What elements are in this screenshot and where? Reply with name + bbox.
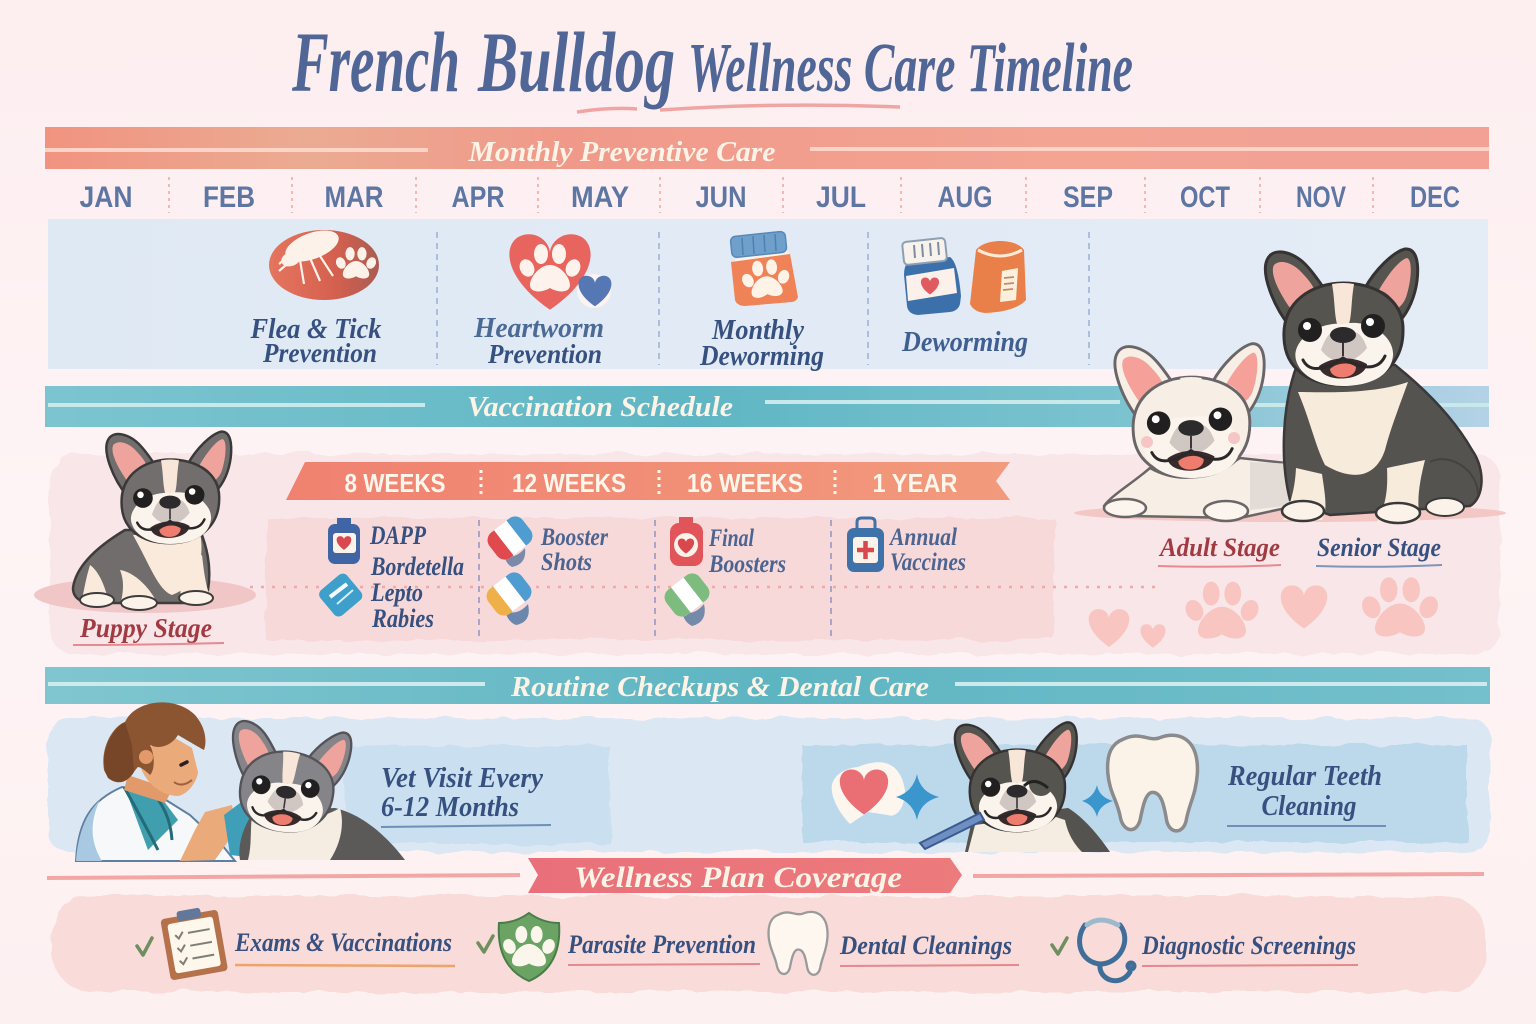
title: Bulldog [477, 14, 675, 110]
text: vet visit frequency [381, 762, 551, 827]
text: final boosters: Final [708, 525, 754, 552]
icon: heart on tooth [832, 762, 905, 824]
ribbon: age milestones: 12 WEEKS [512, 468, 626, 498]
panel: coverage background [52, 896, 1486, 992]
icon: small sparkle [1082, 785, 1113, 817]
text: exams and vaccinations: Exams & Vaccinations [234, 928, 452, 957]
icon: flea and paw [269, 224, 379, 300]
text: vaccine names: Rabies [371, 604, 434, 633]
illustration: puppy stage dog [34, 432, 256, 613]
ribbon: age milestones: 16 WEEKS [687, 468, 803, 498]
column: 8 weeks vaccines [317, 518, 464, 633]
text: annual vaccines: Annual [888, 524, 957, 551]
text: vet visit frequency: Vet Visit Every [381, 762, 543, 794]
band: wellness plan coverage: Wellness Plan Coverage [574, 861, 902, 894]
month labels: DEC [1410, 181, 1460, 214]
band: vaccination schedule: Vaccination Schedule [467, 391, 733, 423]
text: annual vaccines: Vaccines [890, 549, 966, 576]
text: deworming: Deworming [901, 327, 1028, 358]
icon: blue vaccine card [317, 571, 365, 619]
band: monthly preventive care [45, 127, 1489, 169]
ribbon: age milestones: 1 YEAR [872, 468, 958, 498]
text: vaccine names [369, 521, 464, 633]
icon: red and blue capsule [484, 513, 536, 567]
label: senior stage: Senior Stage [1317, 533, 1441, 562]
title: French [291, 14, 460, 110]
text: booster shots: Shots [541, 549, 592, 576]
column: 12 weeks vaccines [483, 513, 608, 625]
icon: check [1052, 938, 1067, 954]
panel: vaccination background [50, 454, 1500, 654]
icon: tooth [769, 912, 828, 975]
icon: medicine bottle and can [902, 238, 1026, 315]
icon: stethoscope [1080, 920, 1134, 981]
illustration: senior stage dog [1265, 249, 1482, 523]
coverage item: dental cleanings [769, 912, 1019, 975]
ribbon: age milestones: 8 WEEKS [344, 468, 446, 498]
text: parasite prevention: Parasite Prevention [567, 930, 756, 959]
text: regular teeth cleaning: Regular Teeth [1227, 760, 1382, 792]
icon: clipboard [159, 904, 228, 981]
illustration: dog at vet [221, 717, 405, 860]
icon: medical kit [847, 518, 884, 572]
illustration: adult and senior dogs [1074, 249, 1506, 523]
text: booster shots [540, 524, 608, 576]
ribbon: age milestones [286, 462, 1010, 500]
text: flea and tick prevention [250, 314, 382, 368]
coverage item: parasite prevention [478, 913, 760, 981]
text: annual vaccines [888, 524, 966, 576]
text: monthly deworming [699, 315, 824, 372]
text: monthly deworming: Monthly [711, 315, 805, 346]
illustration: adult stage dog [1104, 344, 1295, 521]
text: dental cleanings: Dental Cleanings [839, 931, 1012, 960]
text: vaccine names: Lepto [370, 578, 423, 607]
coverage item: diagnostic screenings [1052, 920, 1358, 981]
month labels: APR [452, 181, 505, 214]
text: vaccine names: Bordetella [370, 552, 464, 581]
text: final boosters [708, 525, 786, 578]
icon: orange and blue capsule [483, 569, 535, 625]
icon: check [478, 936, 493, 952]
month labels: FEB [203, 181, 255, 214]
icon: large tooth [1108, 735, 1197, 831]
text: monthly deworming: Deworming [699, 341, 824, 372]
band: vaccination schedule [45, 386, 1489, 427]
icon: red vaccine bag [670, 517, 703, 566]
text: booster shots: Booster [540, 524, 608, 551]
text: heartworm prevention: Prevention [487, 339, 602, 369]
illustration: dog with toothbrush [920, 722, 1110, 852]
month labels: OCT [1180, 181, 1230, 214]
decorative hearts and paws [1089, 577, 1441, 648]
band: routine checkups and dental care: Routine Checkups & Dental Care [510, 671, 929, 703]
icon: check [137, 938, 152, 955]
panel: dental care [802, 722, 1467, 852]
month labels: MAR [324, 181, 384, 214]
text: regular teeth cleaning [1227, 760, 1386, 826]
coverage item: exams and vaccinations [137, 904, 455, 981]
text: flea and tick prevention: Prevention [262, 338, 377, 368]
text: diagnostic screenings: Diagnostic Screenings [1141, 931, 1356, 960]
month labels: MAY [571, 181, 629, 214]
icon: jar [730, 231, 798, 306]
text: vaccine names: DAPP [369, 521, 427, 550]
band: routine checkups and dental care [45, 667, 1490, 704]
icon: large sparkle [896, 774, 939, 820]
month labels: NOV [1296, 181, 1346, 214]
month labels: SEP [1063, 181, 1113, 214]
text: regular teeth cleaning: Cleaning [1262, 790, 1356, 822]
month labels: JAN [80, 181, 132, 214]
title: Wellness Care Timeline [688, 30, 1133, 107]
text: heartworm prevention: Heartworm [473, 313, 604, 344]
label: adult stage: Adult Stage [1158, 533, 1280, 562]
month labels: JUL [816, 181, 866, 214]
column: 16 weeks vaccines [661, 517, 786, 626]
title [291, 14, 1133, 112]
text: final boosters: Boosters [708, 551, 786, 578]
month labels [80, 177, 1460, 214]
icon: shield with paw [499, 913, 559, 981]
band: monthly preventive care: Monthly Preventive Care [467, 136, 776, 168]
text: heartworm prevention [473, 313, 604, 369]
icon: vaccine bottle [328, 518, 360, 564]
illustration: vet holding dog [76, 702, 262, 861]
panel: monthly care [48, 219, 1488, 372]
text: flea and tick prevention: Flea & Tick [250, 314, 382, 345]
label: puppy stage: Puppy Stage [79, 613, 212, 643]
icon: heart with paw [509, 234, 611, 310]
icon: green capsule [661, 570, 713, 626]
month labels: AUG [938, 181, 992, 214]
month labels: JUN [696, 181, 746, 214]
panel: vet visit [48, 702, 1490, 861]
text: vet visit frequency: 6-12 Months [381, 791, 519, 823]
column: 1 year vaccines [847, 518, 966, 576]
band: wellness plan coverage [47, 858, 1484, 894]
